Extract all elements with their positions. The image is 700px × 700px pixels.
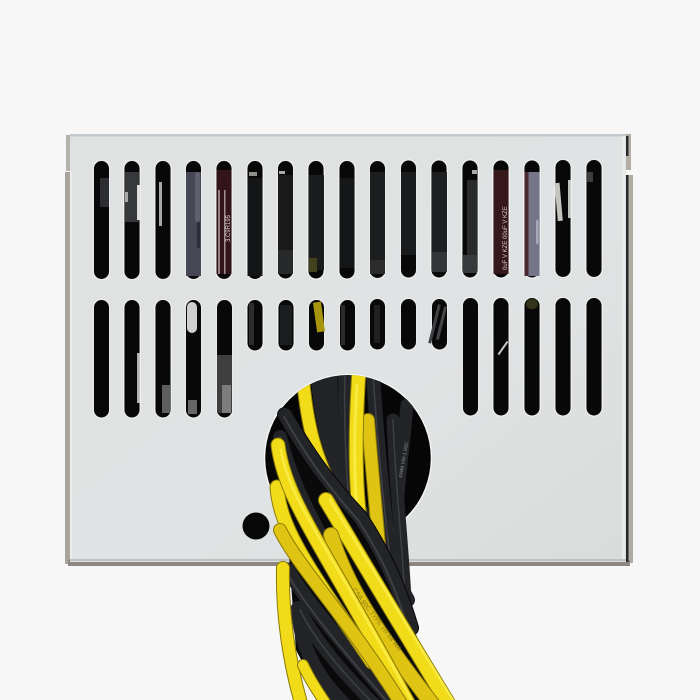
rear black cables <box>317 370 408 600</box>
upper row of ventilation slots <box>94 160 602 280</box>
printing on yellow cable: CSA 80C TYPE TR 64 WA <box>350 587 403 653</box>
front yellow cables <box>277 445 456 700</box>
cable exit opening <box>264 374 432 542</box>
dark fill between cables <box>283 430 450 700</box>
lower row of ventilation slots <box>94 298 602 418</box>
components seen through upper slots <box>100 170 593 276</box>
front black cables <box>280 415 411 700</box>
mounting screw hole <box>242 512 270 540</box>
capacitor marking left: 3.C9R195 <box>226 214 232 242</box>
rear yellow cables <box>303 370 379 545</box>
capacitor marking right: 0uF V KZE 00uF V KZE <box>503 206 509 270</box>
printing on black cable: AWM VW-1 80C <box>398 441 410 478</box>
components seen through lower slots <box>137 299 538 414</box>
cable bundle <box>277 370 456 700</box>
metal housing panel <box>65 134 633 566</box>
power supply photo illustration <box>65 134 633 700</box>
